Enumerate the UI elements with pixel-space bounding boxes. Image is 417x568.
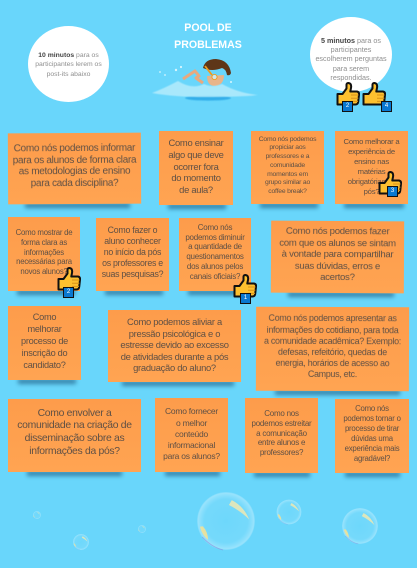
sticky note 5 <box>8 217 80 291</box>
vote badge 2 <box>342 101 353 112</box>
sticky note 8: Como nós podemos fazer <box>286 226 389 237</box>
sticky note 14: podemos estreitar <box>252 419 311 428</box>
sticky note 14: professores? <box>260 448 303 457</box>
sticky note 4: obrigatórias da <box>348 177 395 186</box>
sticky note 9 <box>8 306 81 380</box>
sticky note 3: Como nós podemos <box>259 136 316 143</box>
sticky note 6: Como fazer o <box>108 224 157 234</box>
sticky note 7: dos alunos pelos <box>187 262 243 271</box>
sticky note 6: os professores e <box>102 258 163 268</box>
sticky note 2: de aula? <box>179 184 213 195</box>
circle: 5 minutos: 5 minutos para os <box>321 36 381 44</box>
icon: swimmer <box>152 59 257 102</box>
sticky note 3: momentos em <box>267 170 308 178</box>
icon: thumbs up 2 <box>336 82 360 106</box>
sticky note 13: conteúdo <box>175 429 208 439</box>
sticky note 1 <box>8 133 141 204</box>
icon: thumbs up 3 <box>378 171 402 194</box>
sticky note 6: aluno conhecer <box>104 236 161 246</box>
sticky note 4: pós? <box>364 187 379 196</box>
vote badge 2 on note: 2 <box>67 289 70 295</box>
sticky note 12: disseminação sobre as <box>25 433 124 444</box>
sticky note 15 <box>335 399 409 473</box>
sticky note 9: Como <box>33 312 56 322</box>
sticky note 15: podemos tornar o <box>343 414 401 423</box>
sticky note 11 <box>256 307 409 391</box>
sticky note 4: experiência de <box>348 147 395 156</box>
sticky note 14: entre alunos e <box>258 438 305 447</box>
sticky note 11: informações do cotidiano, para toda <box>267 324 398 335</box>
circle: 10 minutos <box>28 26 109 102</box>
sticky note 3: comunidade <box>270 162 305 169</box>
sticky note 8: suas dúvidas, erros e <box>295 260 380 272</box>
circle: 10 minutos: post-its abaixo <box>47 70 90 78</box>
sticky note 1: para os alunos de forma clara <box>13 154 136 166</box>
vote badge 2: 2 <box>346 103 349 109</box>
vote badge 3 <box>387 186 398 197</box>
title: POOL DE <box>184 22 232 34</box>
sticky note 9: melhorar <box>27 324 62 334</box>
sticky note 14 <box>245 398 318 473</box>
sticky note 8: com que os alunos se sintam <box>279 237 396 249</box>
title <box>174 22 242 50</box>
sticky note 3: coffee break? <box>268 188 307 195</box>
vote badge 2 on note <box>63 287 74 298</box>
sticky note 7: podemos diminuir <box>185 233 245 242</box>
sticky note 12 <box>8 399 141 472</box>
circle: 5 minutos: respondidas. <box>330 73 372 82</box>
sticky note 15: dúvidas uma <box>351 434 393 443</box>
vote badge 4 <box>381 101 392 112</box>
sticky note 7: a quantidade de <box>188 242 242 251</box>
sticky note 4: Como melhorar a <box>344 137 399 146</box>
sticky note 2: ocorrer fora <box>173 161 219 172</box>
circle: 5 minutos <box>310 17 392 92</box>
sticky note 5: novos alunos? <box>20 267 68 276</box>
sticky note 1: Como nós podemos informar <box>14 143 135 154</box>
sticky note 5: necessárias para <box>16 257 72 266</box>
sticky note 15: experiência mais <box>345 444 399 453</box>
sticky note 13: o melhor <box>176 418 207 428</box>
sticky note 13 <box>155 398 228 472</box>
sticky note 11: Campus, etc. <box>308 369 357 379</box>
sticky note 6 <box>96 218 169 291</box>
sticky note 15: processo de tirar <box>345 424 399 433</box>
sticky note 12: Como envolver a <box>38 408 111 418</box>
sticky note 12: comunidade na criação de <box>17 420 132 431</box>
circle: 5 minutos: participantes <box>331 45 371 54</box>
vote badge 1: 1 <box>244 295 247 301</box>
vote badge 1 <box>240 293 251 304</box>
sticky note 7: Como nós <box>198 223 232 232</box>
sticky note 11: Como nós podemos apresentar as <box>269 313 397 324</box>
sticky note 4: ensino nas <box>354 157 389 166</box>
sticky note 2 <box>159 131 233 205</box>
icon: thumbs up 1 <box>234 274 257 298</box>
icon: thumbs up 4 <box>362 82 386 106</box>
circle: 5 minutos: escolherem perguntas <box>315 54 387 63</box>
sticky note 13: Como fornecer <box>165 406 218 416</box>
sticky note 6: no início da pós <box>104 246 161 256</box>
sticky note 7: questionamentos <box>186 252 244 261</box>
circle: 10 minutos: participantes lerem os <box>35 61 102 68</box>
sticky note 5: Como mostrar de <box>16 228 72 237</box>
sticky note 10: de atividades durante a pós <box>121 350 228 362</box>
sticky note 8: acertos? <box>320 272 355 283</box>
sticky note 5: forma clara as <box>21 238 67 247</box>
sticky note 15: Como nós <box>355 404 389 413</box>
sticky note 4 <box>335 131 408 204</box>
vote badge 4: 4 <box>385 103 388 109</box>
sticky note 5: informações <box>24 248 64 257</box>
sticky note 8: à vontade para compartilhar <box>282 249 393 260</box>
bubbles <box>33 492 378 550</box>
sticky note 2: do momento <box>171 172 221 183</box>
sticky note 7: canais oficiais? <box>190 272 240 281</box>
sticky note 3 <box>251 131 324 204</box>
title: PROBLEMAS <box>174 38 242 50</box>
sticky note 13: informacional <box>168 440 215 450</box>
sticky note 10 <box>108 310 241 382</box>
circle: 5 minutos: para serem <box>333 64 369 73</box>
circle: 10 minutos: 10 minutos para os <box>38 52 99 58</box>
sticky note 1: as metodologias de ensino <box>19 166 130 178</box>
sticky note 3: grupo similar ao <box>265 179 310 186</box>
sticky note 10: graduação do aluno? <box>133 362 216 373</box>
sticky note 13: para os alunos? <box>163 451 220 461</box>
sticky note 14: a comunicação <box>256 429 307 438</box>
sticky note 12: informações da pós? <box>29 446 120 457</box>
sticky note 9: inscrição do <box>22 348 67 358</box>
sticky note 11: energia, horários de acesso ao <box>275 358 389 368</box>
vote badge 3: 3 <box>391 188 394 194</box>
sticky note 10: pressão psicológica e o <box>129 328 220 338</box>
sticky note 14: Como nos <box>264 409 299 418</box>
sticky note 3: propiciar aos <box>269 144 306 151</box>
sticky note 11: defesas, refeitório, quedas de <box>278 347 387 357</box>
sticky note 15: agradável? <box>354 454 390 463</box>
sticky note 9: candidato? <box>23 360 66 370</box>
sticky note 2: algo que deve <box>168 149 224 160</box>
sticky note 9: processo de <box>21 336 68 346</box>
sticky note 10: Como podemos aliviar a <box>127 316 222 327</box>
sticky note 7 <box>179 218 251 291</box>
sticky note 2: Como ensinar <box>168 137 223 148</box>
icon: thumbs up 2 on note <box>58 267 81 290</box>
sticky note 11: a comunidade acadêmica? Exemplo: <box>264 336 401 346</box>
sticky note 6: suas pesquisas? <box>102 268 163 278</box>
sticky note 1: para cada disciplina? <box>31 178 118 189</box>
sticky note 10: estresse devido ao excesso <box>120 339 229 350</box>
sticky note 8 <box>271 221 404 293</box>
sticky note 4: matérias <box>358 167 385 176</box>
sticky note 3: professores e a <box>266 153 309 160</box>
